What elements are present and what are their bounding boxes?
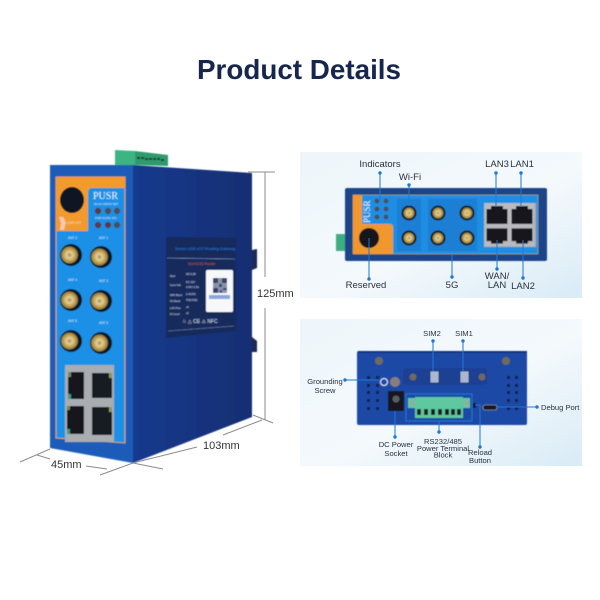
callout labels: LAN3 [485, 159, 509, 170]
callout labels: Reserved [346, 280, 386, 291]
logo figure [59, 217, 66, 230]
callout labels: LAN2 [511, 281, 535, 292]
callout labels: RS232/485 [424, 437, 462, 446]
indicators: PWR WORK SIG [95, 216, 117, 220]
front face [50, 165, 133, 463]
dimension: 45mm [20, 449, 133, 475]
callout labels: Socket [384, 449, 408, 458]
product label: M2 5.2R [186, 272, 196, 276]
terminal block [408, 397, 470, 418]
grounding screw [380, 378, 388, 386]
indicator lights [374, 198, 388, 220]
callout labels: DC Power [379, 440, 414, 449]
callout labels: Button [469, 456, 491, 465]
debug port [483, 405, 497, 410]
callout labels: 5G [446, 280, 458, 291]
callout labels: SIM1 [455, 329, 473, 338]
chassis [336, 188, 547, 261]
callout labels: LAN [488, 280, 506, 291]
product label: WiFi Band [170, 293, 183, 297]
antenna connectors: ANT 3 [99, 279, 108, 283]
callout labels: Wi-Fi [399, 172, 421, 183]
callout labels: WAN/ [485, 271, 510, 282]
dimension: 125mm: 125mm [257, 288, 294, 300]
corner screws [375, 357, 383, 365]
din rail clips [252, 249, 257, 352]
device: front 3D view of router: USR IOT [67, 221, 82, 225]
SIM slots [430, 371, 439, 383]
antenna connectors: ANT 6 [68, 319, 77, 323]
product label: x2 [186, 311, 189, 315]
indicators: WLAN WWAN NET [94, 202, 119, 206]
vent holes [367, 376, 518, 410]
front light-blue plate [56, 177, 125, 443]
antenna groups [397, 199, 421, 251]
product label: x4 [186, 305, 189, 309]
product label: DI Level [170, 312, 180, 316]
callout labels: LAN1 [510, 159, 534, 170]
callout labels: Reload [468, 448, 492, 457]
product label: TDD FDD [186, 298, 198, 302]
antenna connectors: ANT 5 [99, 321, 108, 325]
dimension: 103mm: 103mm [203, 440, 240, 452]
terminal block on top [115, 150, 168, 166]
orange label area [56, 177, 125, 231]
dimension: 125mm [248, 172, 294, 423]
chassis [357, 351, 527, 425]
product label: 5G Band [170, 299, 181, 303]
product label: Mod [170, 274, 176, 278]
indicators [94, 202, 120, 228]
antenna connectors: ANT 1 [99, 236, 108, 240]
side face [133, 165, 252, 463]
callout lines [344, 340, 538, 448]
callout labels [346, 159, 535, 292]
reload button [473, 403, 476, 408]
ethernet ports [65, 365, 114, 442]
antenna connectors: ANT 2 [68, 236, 77, 240]
product label: 2.4G/5G [186, 292, 196, 296]
callout labels [307, 329, 580, 465]
callout labels: Indicators [359, 159, 401, 170]
product label: 9-36V 1.5A [186, 285, 199, 289]
callout labels: Block [434, 450, 452, 460]
antenna connectors: ANT 4 [68, 278, 77, 282]
callout labels: Screw [314, 386, 336, 395]
product label: DC 12V [186, 280, 195, 284]
dimension: 103mm [133, 420, 262, 469]
callout labels: Power Terminal [417, 444, 469, 453]
callout labels: Debug Port [541, 403, 580, 412]
panel: top view [300, 152, 582, 298]
antenna connectors [60, 236, 112, 354]
product label: Series USR-IOT Routing Gateway [175, 246, 236, 251]
brand: PUSR [362, 200, 372, 223]
panel: bottom view [300, 319, 582, 466]
DC socket [388, 391, 404, 411]
LAN ports [484, 203, 536, 247]
device: front 3D view of router [50, 150, 257, 463]
product label: LAN Port [170, 306, 181, 310]
callout lines [368, 172, 524, 280]
product label [166, 237, 236, 338]
brand: PUSR [93, 191, 118, 202]
callout labels: Grounding [307, 377, 343, 386]
reserved button [359, 228, 379, 248]
product label: Input Volt [170, 283, 181, 287]
product label: ♲ △ CE ⚠ NFC [182, 319, 218, 325]
callout labels: SIM2 [423, 329, 441, 338]
title: Product Details [197, 54, 401, 85]
product label: 5G/4G/3G Router [188, 262, 216, 266]
dimension: 45mm: 45mm [51, 459, 82, 471]
reserved button [60, 187, 84, 213]
